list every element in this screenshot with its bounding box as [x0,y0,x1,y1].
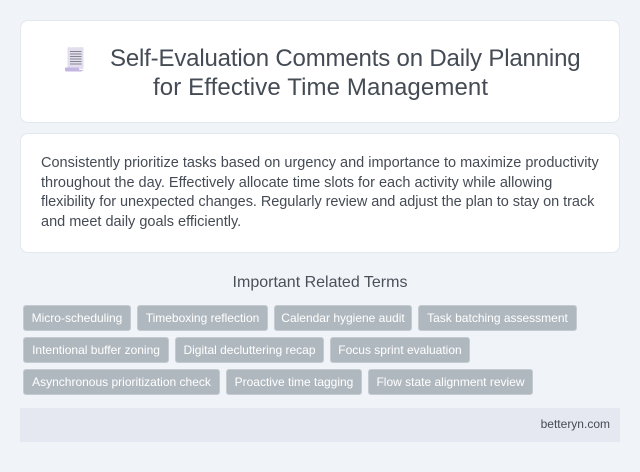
tag [23,305,131,331]
tag [23,369,220,395]
title line 1: Self-Evaluation Comments on Daily Planning [110,45,580,72]
tag list [23,305,577,395]
tag: Task batching assessment [427,311,568,325]
tag: Proactive time tagging [235,375,353,389]
tag [137,305,268,331]
tag: Intentional buffer zoning [32,343,160,357]
tag: Flow state alignment review [376,375,525,389]
summary text: and meet daily goals efficiently. [41,214,241,230]
tag [418,305,577,331]
tag: Asynchronous prioritization check [32,375,211,389]
footer source: betteryn.com [541,417,610,431]
footer bar [20,408,620,442]
tag: Timeboxing reflection [146,311,259,325]
tag: Micro-scheduling [32,311,122,325]
summary text: flexibility for unexpected changes. Regularly review and adjust the plan to stay on track [41,194,594,210]
panel: summary card [20,133,620,253]
summary text [41,155,599,230]
tag: Calendar hygiene audit [281,311,405,325]
tag: Focus sprint evaluation [338,343,462,357]
tag: Digital decluttering recap [183,343,316,357]
title [110,45,580,101]
tag [330,337,470,363]
summary text: Consistently prioritize tasks based on urgency and importance to maximize productivity [41,155,599,171]
tag [23,337,169,363]
panel: title card [20,20,620,123]
tag [226,369,362,395]
tag [368,369,533,395]
heading: related terms: Important Related Terms [233,274,407,291]
tag [175,337,324,363]
summary text: throughout the day. Effectively allocate time slots for each activity while allowing [41,174,552,190]
tag [274,305,412,331]
title line 2: for Effective Time Management [153,74,488,101]
icon: document list [65,47,84,72]
